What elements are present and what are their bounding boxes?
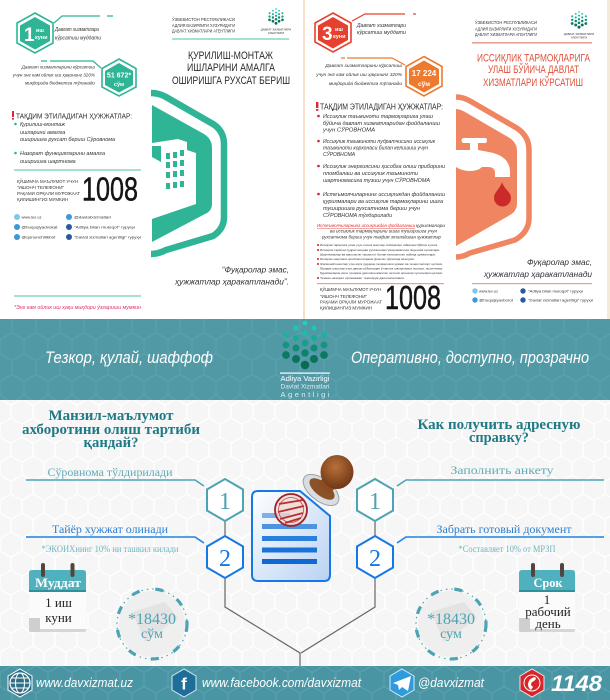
heading russian: Как получить адресную — [418, 417, 580, 433]
service title: ИШЛАРИНИ АМАЛГА — [187, 62, 276, 74]
agency header: ДАВЛАТ ХИЗМАТЛАРИ АГЕНТЛИГИ — [172, 28, 235, 34]
social links — [472, 288, 593, 303]
step 2 uzbek: Тайёр хужжат олинади — [52, 522, 169, 536]
heading uzbek: Манзил-маълумот — [48, 408, 174, 424]
step 1 russian: 1 — [369, 489, 381, 515]
social links — [14, 214, 141, 240]
term badge: 3 days — [315, 13, 416, 52]
calendar: term russian: рабочий — [525, 604, 571, 619]
price badge: 51 672* — [107, 72, 131, 80]
calendar: term uzbek — [29, 563, 86, 632]
footnote: *Энг кам ойлик иш ҳақи миқдори ўзгариши мумкин — [14, 304, 141, 311]
icon: facebook — [172, 669, 196, 697]
slogan quote: Фуқаролар эмас, — [527, 257, 592, 267]
slogan quote: “Фуқаролар эмас, — [222, 266, 289, 274]
connector lines — [225, 521, 375, 666]
documents list: СЎРОВНОМА тўлдирилади — [323, 211, 392, 219]
calendar: term russian — [519, 563, 575, 632]
documents list: оширишга рухсат бериш Сўровнома — [20, 136, 115, 143]
price description — [315, 62, 403, 87]
slogan quote — [174, 266, 289, 286]
fine print list: Жисмоний шахслар учун мулк ҳуқуқини тасдиқловчи ҳужжат ва техник паспорт нусхаси. — [320, 262, 443, 266]
service title: ОШИРИШГА РУХСАТ БЕРИШ — [172, 75, 290, 87]
term label: Давлат хизматлари — [356, 23, 406, 29]
fee note uzbek: *ЭКОИХнинг 10% ни ташкил килади — [42, 544, 179, 554]
documents list: пломбалаш ва иссиқлик таъминоти — [323, 171, 418, 177]
icon: telegram — [390, 669, 414, 697]
trust phone 1008: ҚИЛИШИНГИЗ МУМКИН — [17, 197, 68, 202]
documents list: Назорат функцияларини амалга — [20, 151, 105, 157]
service title — [172, 50, 290, 87]
social links: "Davlat xizmatlari agentligi" гуруҳи — [74, 234, 141, 240]
term badge: 3 days: 3 — [322, 24, 333, 45]
agency header: АГЕНТЛИГИ — [268, 31, 284, 35]
documents list: оширишга шартнома — [20, 159, 76, 165]
fine print list: Шартномалар ва ваколатли ташкилот билан келишилган лойиҳа ҳужжатлари. — [320, 252, 436, 256]
fine print list — [317, 243, 443, 280]
heading russian: справку? — [469, 430, 529, 446]
icon: facebook: f — [181, 674, 187, 694]
documents list: Иссиқлик таъминоти тармоқларига улаш — [323, 114, 434, 120]
agency header: АДЛИЯ ВАЗИРЛИГИ ХУЗУРИДАГИ — [475, 26, 537, 32]
documents list: шартномасига тузиш учун СЎРОВНОМА — [323, 176, 431, 184]
term label: кўрсатиш муддати — [55, 34, 101, 42]
trust phone 1008: ҚИЛИШИНГИЗ МУМКИН — [320, 306, 372, 310]
service title: ҚУРИЛИШ-МОНТАЖ — [188, 50, 273, 62]
step 2 uzbek: 2 — [219, 546, 231, 572]
step 2 russian — [357, 522, 604, 578]
documents list — [14, 122, 115, 165]
heading uzbek — [22, 408, 200, 451]
trust phone 1008: “ИШОНЧ ТЕЛЕФОНИ” — [320, 294, 367, 299]
fine print list: Иссиқлик тармоғи пудратчисидан рухсатнома гувоҳномаси ва лицензия нусхалари. — [320, 248, 440, 252]
price badge: 17 224 — [412, 69, 437, 78]
calendar: term uzbek: Муддат — [35, 576, 81, 590]
icon: phone — [520, 669, 544, 697]
panel: heating network leaflet — [305, 0, 610, 319]
calendar: term russian: 1 — [544, 592, 550, 607]
documents list — [317, 114, 446, 219]
fine print list: Иссиқлик энергияси ҳисоблагичларини ўрнатиш тўғрисида маълумот. — [320, 257, 415, 261]
price badge: сўм — [418, 80, 430, 88]
step 1 russian: Заполнить анкету — [450, 463, 554, 477]
social links: "Adliya bilan muloqot" гуруҳи — [74, 224, 135, 230]
term badge: 3 days: куни — [333, 34, 346, 40]
heading uzbek: ахборотини олиш тартиби — [22, 422, 200, 438]
icon: document with stamp — [252, 455, 354, 581]
term badge: 1 day: иш — [36, 28, 44, 34]
telegram link: @davxizmat — [418, 676, 484, 690]
fine print list: Қурилмаларни ишга тушириш далолатномаси ва тегишли органлар хулосалари нусхаси. — [320, 271, 443, 275]
note on required documents: рухсатнома бериш учун тақдим этиладиган ҳужжатлар — [321, 234, 442, 240]
fine print list: Юридик шахслар учун давлат рўйхатидан ўтганлик гувоҳномаси нусхаси, ишончнома. — [320, 266, 443, 270]
documents list: Иссиқлик энергиясини ҳисобга олиш приборини — [323, 164, 445, 170]
website link: www.davxizmat.uz — [36, 676, 134, 690]
trust phone 1008: ҚЎШИМЧА МАЪЛУМОТ УЧУН — [17, 179, 78, 184]
fee circle uzbek — [117, 589, 187, 659]
trust phone 1008: ҚЎШИМЧА МАЪЛУМОТ УЧУН — [320, 285, 381, 292]
note on required documents: Истеъмолчиларнинг иссиқликдан фойдаланиш — [317, 223, 416, 228]
slogan quote: ҳужжатлар ҳаракатланади — [483, 269, 592, 279]
term badge: 1 day — [17, 13, 113, 53]
panel: construction permit leaflet — [0, 0, 305, 319]
step 2 russian: 2 — [369, 546, 381, 572]
note on required documents: ва иссиқлик тармоқларини ишга туширишга учун — [330, 228, 438, 234]
fine print list: Техник назорат органининг текширув далолатномаси. — [320, 276, 405, 280]
step 2 russian: Забрать готовый документ — [436, 522, 572, 536]
price description: Давлат хизматларини кўрсатиш — [324, 62, 402, 69]
term label — [54, 27, 101, 42]
documents heading: ТАҚДИМ ЭТИЛАДИГАН ҲУЖЖАТЛАР: — [16, 112, 132, 120]
agency header: ДАВЛАТ ХИЗМАТЛАРИ — [261, 28, 291, 32]
trust phone 1008 — [17, 170, 138, 208]
documents list: ишларини амалга — [20, 130, 65, 136]
social links: @davlatxizmatlari — [74, 214, 111, 220]
price description: учун энг кам ойлик иш ҳақининг 320% — [12, 72, 95, 78]
agency header: АГЕНТЛИГИ — [571, 36, 587, 40]
term label: кўрсатиш муддати — [357, 29, 406, 36]
trust phone 1008: 1008 — [82, 170, 138, 208]
documents list: Қурилиш-монтаж — [20, 122, 65, 128]
agency header — [172, 8, 291, 40]
step 2 uzbek — [26, 522, 243, 578]
fee note russian: *Составляет 10% от МРЗП — [458, 544, 556, 554]
agency logo: Davlat Xizmatlari — [280, 384, 330, 390]
price description: миқдорида бюджетга тўланади — [25, 80, 95, 86]
trust phone 1008: 1008 — [385, 279, 441, 316]
facebook link: www.facebook.com/davxizmat — [202, 676, 361, 690]
social links: @qonunchilikbot — [22, 234, 57, 240]
term label: Давлат хизматлари — [54, 27, 99, 33]
documents list: Иссиқлик таъминоти пудратчисини иссиқлик — [323, 139, 436, 145]
term badge: 3 days: иш — [335, 27, 343, 33]
price badge — [41, 59, 136, 96]
fee circle russian — [416, 589, 486, 659]
price description: миқдорида бюджетга тўланади — [329, 80, 402, 87]
trust phone 1008: РАҚАМИ ОРҚАЛИ МУРОЖААТ — [320, 300, 382, 304]
slogan quote — [483, 257, 592, 279]
social links: @huquqiyaxborot — [479, 298, 514, 302]
calendar: term russian: Срок — [534, 576, 563, 590]
agency header: ЎЗБЕКИСТОН РЕСПУБЛИКАСИ — [172, 17, 235, 22]
fee circle russian: *18430 — [427, 611, 475, 628]
price badge: сўм — [114, 81, 124, 88]
agency header — [472, 11, 594, 44]
service title: УЛАШ БЎЙИЧА ДАВЛАТ — [488, 63, 579, 76]
step 1 russian — [357, 463, 604, 521]
agency header: АДЛИЯ ВАЗИРЛИГИ ХУЗУРИДАГИ — [172, 23, 235, 28]
icon: globe — [8, 669, 32, 697]
documents heading: ТАҚДИМ ЭТИЛАДИГАН ҲУЖЖАТЛАР: — [320, 102, 443, 112]
social links: www.lex.uz — [22, 214, 42, 220]
heading uzbek: қандай? — [84, 435, 138, 451]
note on required documents — [317, 223, 446, 240]
trust phone 1008: “ИШОНЧ ТЕЛЕФОНИ” — [17, 185, 65, 190]
trust phone 1008 — [320, 279, 441, 316]
service title — [477, 52, 590, 89]
step 1 uzbek — [26, 465, 243, 521]
trust phone 1008: РАҚАМИ ОРҚАЛИ МУРОЖААТ — [17, 191, 80, 196]
agency header: ДАВЛАТ ХИЗМАТЛАРИ АГЕНТЛИГИ — [475, 32, 537, 37]
panel: address certificate steps — [0, 400, 610, 666]
heading russian — [418, 417, 580, 446]
icon: water tap in hexagon — [456, 97, 529, 257]
calendar: term uzbek: 1 иш — [45, 595, 72, 610]
agency header: ДАВЛАТ ХИЗМАТЛАРИ — [564, 32, 594, 36]
social links: "Adliya bilan muloqot" гуруҳи — [528, 290, 583, 294]
documents list: бўйича давлат хизматларидан фойдаланиш — [323, 120, 441, 127]
social links: www.lex.uz — [479, 290, 498, 294]
price description — [12, 64, 95, 86]
documents list: СЎРОВНОМА — [323, 150, 356, 158]
calendar: term russian: день — [535, 616, 561, 631]
documents list: таъминоти корхонаси билан келишиш учун — [323, 146, 428, 152]
agency logo: Agentligi — [280, 390, 330, 399]
documents list: учун СЎРОВНОМА — [322, 126, 376, 134]
social links: "Davlat xizmatlari agentligi" гуруҳи — [528, 298, 593, 302]
step 1 uzbek: Сўровнома тўлдирилади — [48, 465, 173, 479]
fee circle russian: сум — [440, 627, 462, 642]
agency header: ЎЗБЕКИСТОН РЕСПУБЛИКАСИ — [475, 20, 537, 25]
documents list: қурилмалари ва иссиқлик тармоқларини ишга — [323, 199, 443, 205]
slogan uzbek: Тезкор, қулай, шаффоф — [45, 348, 213, 367]
agency logo: Adliya Vazirligi — [280, 374, 330, 383]
term badge: 1 day: 1 — [24, 25, 35, 46]
fee circle uzbek: *18430 — [128, 611, 176, 628]
price description: Давлат хизматларини кўрсатиш — [21, 64, 95, 70]
term badge: 1 day: куни — [35, 35, 48, 41]
documents list: Истеъмолчиларнинг иссиқликдан фойдаланиш — [323, 191, 446, 198]
price description: учун энг кам ойлик иш ҳақининг 320% — [315, 71, 403, 78]
social links: @huquqiyadvokat — [22, 224, 58, 230]
note on required documents: қурилмалари — [416, 223, 446, 228]
icon: building in hexagon — [151, 93, 224, 254]
hotline number: 1148 — [551, 671, 603, 696]
slogan quote: ҳужжатлар ҳаракатланади”. — [174, 278, 289, 286]
panel: teal slogan band — [0, 319, 610, 400]
footer contact bar — [0, 666, 610, 700]
step 1 uzbek: 1 — [219, 489, 231, 515]
documents list: туширишга рухсатнома бериш учун — [323, 206, 420, 212]
fee circle uzbek: сўм — [141, 627, 163, 642]
price badge — [341, 56, 442, 96]
calendar: term uzbek: куни — [45, 610, 72, 625]
term label — [356, 23, 406, 36]
fine print list: Иссиқлик тармоғига улаш учун техник шартлар лойиҳасини тайёрлаш бўйича хулоса. — [320, 243, 438, 247]
agency logo — [280, 321, 330, 399]
